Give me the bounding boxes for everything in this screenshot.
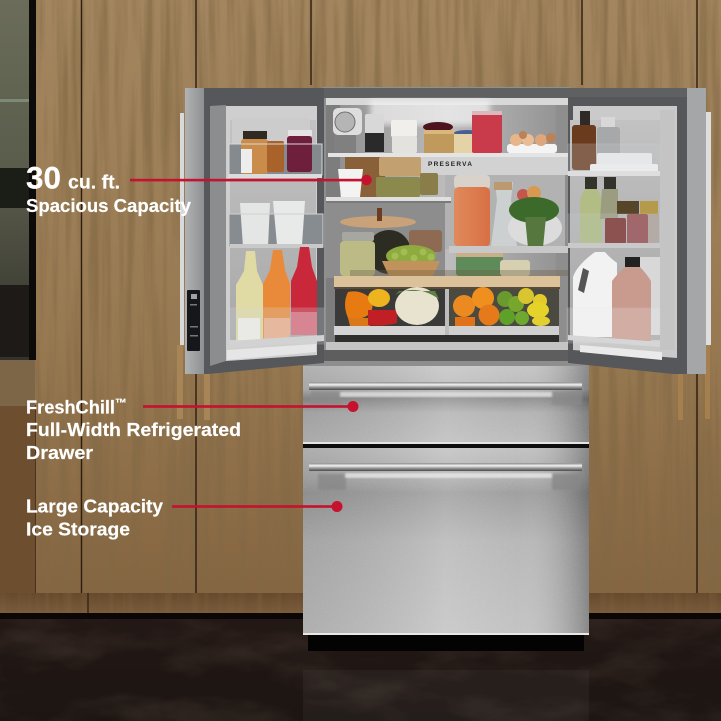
crisper drawers [334,287,559,342]
capacity label: Spacious Capacity [26,195,192,216]
control display [187,290,200,351]
pitcher [454,175,490,247]
upper shelf items [328,108,569,157]
callout: FreshChill drawer: Full-Width Refrigerated [26,419,241,440]
berry baskets [423,122,482,153]
drawer 1 [303,366,589,444]
nut container [500,260,530,276]
capacity value: 30 [26,160,61,196]
right crisper drawer [449,287,559,335]
eggs [507,131,557,153]
callout: large capacity ice storage [26,496,342,540]
air filter dial [333,108,362,135]
wood handles on lower cabinets [177,345,710,420]
FreshChill leader line [143,401,358,412]
callout: 30 cu. ft. spacious capacity [26,160,372,216]
door lower strip [580,345,662,360]
baseboard [0,593,721,614]
door liner [573,106,677,358]
door frame [185,88,324,374]
drawer 2 [303,448,589,635]
dark greens [367,230,411,274]
wooden crisper shelf [334,276,560,289]
left door [180,88,324,374]
carafe [491,182,517,246]
door bin middle [568,177,660,248]
left crisper drawer [334,287,445,335]
gasket strip [210,105,226,366]
refrigerator [180,87,711,635]
drawer gap [303,444,589,448]
lower glass shelf [449,246,569,253]
white tubs [391,120,417,153]
right door handle [706,112,711,345]
door lower strip [227,344,316,360]
salad cup [409,230,442,252]
raspberries container [472,111,502,153]
glass jar [340,232,375,276]
callout: FreshChill drawer [26,396,358,463]
callout: large capacity ice storage: Ice Storage [26,518,130,540]
fridge cavity [185,87,706,367]
upper glass shelf [328,153,569,157]
door bin bottom [567,252,660,347]
left door handle [180,113,184,345]
door frame [568,97,687,374]
white cup [338,169,363,197]
second shelf items [326,157,568,203]
door liner [226,106,317,361]
door outer panel [185,88,204,374]
callout: FreshChill drawer: Drawer [26,442,93,463]
can [365,114,384,152]
FreshChill label: FreshChill [26,396,115,418]
crisper top items [340,208,570,277]
cucumber container [456,253,503,276]
door bin top [568,111,660,176]
callout: 30 cu. ft. spacious capacity: cu. ft. [68,172,120,194]
pitcher, carafe, herbs [449,175,569,253]
door bin bottom: bottles [229,247,324,348]
left alcove with dark shelving [0,0,36,593]
kraft box [345,157,385,197]
drawer 1 handle [309,382,582,390]
right door [567,88,711,374]
ice storage leader line [172,501,342,512]
lower cavity bands [303,342,589,367]
preserva panel [420,157,568,175]
food containers [376,157,438,197]
grapes and bowl [382,245,440,277]
capacity leader line [130,175,372,185]
door bin middle [229,201,323,248]
door bin top [228,130,322,178]
drawer 2 handle [309,463,582,471]
middle shelf [326,197,451,201]
floor [0,613,721,721]
preserva panel: PRESERVA [428,161,472,168]
callout: FreshChill drawer: ™ [115,396,127,410]
wooden lid [340,208,416,228]
ice storage label: Large Capacity [26,496,164,516]
door outer panel [687,88,706,374]
herb bouquet [508,186,562,248]
